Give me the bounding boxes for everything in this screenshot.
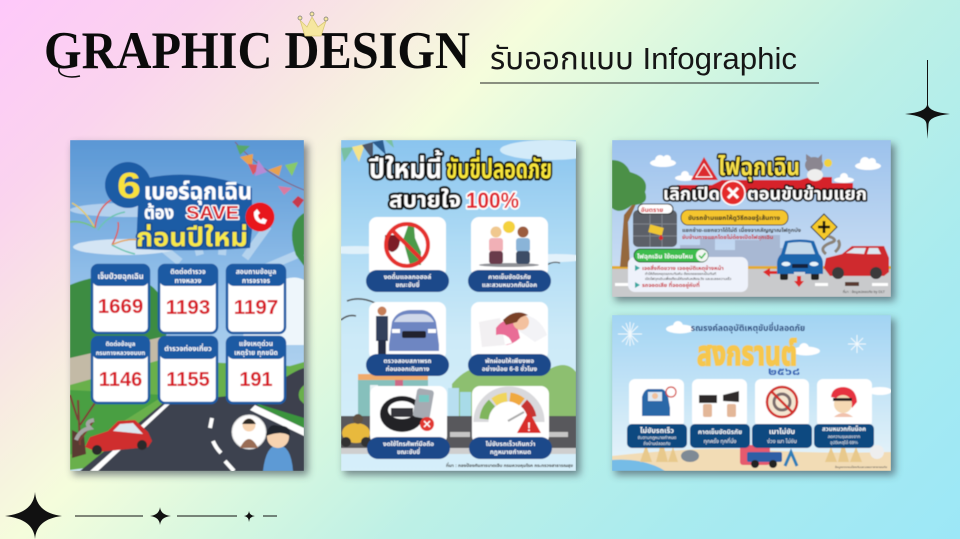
card: rest: อย่างน้อย 6-8 ชั่วโมง xyxy=(482,364,537,373)
poster title: เบอร์ฉุกเฉิน xyxy=(144,178,252,205)
card: seat belt: และสวมหมวกกันน็อค xyxy=(482,281,537,289)
crashed red car and tree xyxy=(70,395,152,458)
icon: scooter rider xyxy=(341,414,371,447)
card 1197: สอบถามข้อมูล xyxy=(236,268,276,276)
poster title: ไฟฉุกเฉิน xyxy=(718,154,800,182)
card: no phone: งดใช้โทรศัพท์มือถือ xyxy=(383,440,434,448)
white advice box: เปิดไฟฉุกเฉินเพื่อเตือนให้รถคันหลังระวัง และชะลอความเร็ว xyxy=(645,276,731,281)
icon: warning triangle xyxy=(691,157,718,180)
white advice box xyxy=(628,257,748,292)
road xyxy=(612,269,891,297)
intersection diagram: อันตราย xyxy=(641,206,663,214)
card 1193: 1193 xyxy=(166,296,210,319)
card: vehicle check: ก่อนออกเดินทาง xyxy=(386,365,430,373)
sky background xyxy=(612,140,891,267)
card: speed gauge xyxy=(469,386,552,459)
source note: ที่มา : ข้อมูลปลอดภัย by DLT xyxy=(843,289,886,294)
explanation text: แยกซ้าย-แยกขวาได้ไม่ดี เนื่องจากสัญญาณไฟถูกบัง xyxy=(682,226,801,234)
card: seat belt xyxy=(690,379,750,448)
poster title xyxy=(368,150,552,212)
poster title xyxy=(663,154,867,204)
smoke xyxy=(823,236,839,254)
red car xyxy=(824,246,889,279)
poster title xyxy=(105,162,252,252)
card 1155: 1155 xyxy=(166,369,210,391)
card: helmet xyxy=(814,379,874,448)
card 1146: 1146 xyxy=(99,369,142,391)
card: no drunk driving: ง่วง เมา ไม่ขับ xyxy=(767,438,797,445)
poster title: ขับขี่ปลอดภัย xyxy=(446,150,552,184)
card: no speeding: ถึงบ้านปลอดภัย xyxy=(643,440,671,446)
sky background xyxy=(70,140,304,471)
card: no drunk driving xyxy=(752,379,812,448)
card 191: 191 xyxy=(239,369,273,391)
card 1193: ติดต่อตำรวจ xyxy=(170,268,206,276)
icon: red X xyxy=(721,181,745,205)
card 1669: 1669 xyxy=(98,295,143,318)
title: Graphic Design: GRAPHIC DESIGN xyxy=(44,22,470,80)
poster title: SAVE xyxy=(186,203,239,223)
card 1193: ทางหลวง xyxy=(175,278,202,285)
card 1197 xyxy=(227,265,285,333)
panel: Songkran safety poster xyxy=(612,315,892,471)
road sign xyxy=(811,214,837,240)
panel: emergency numbers poster xyxy=(70,140,304,471)
green pill: ไฟฉุกเฉิน ใช้ตอนไหน xyxy=(637,252,693,262)
poster title: ต้อง xyxy=(144,202,174,224)
hills xyxy=(70,278,167,358)
card 1669 xyxy=(92,265,149,333)
panel: safe new year driving poster: 100% xyxy=(466,188,519,213)
poster title: เลิกเปิด xyxy=(663,184,720,204)
card: vehicle check: ตรวจสอบสภาพรถ xyxy=(384,358,432,365)
fireworks xyxy=(70,198,140,254)
card: speed gauge: ! xyxy=(527,420,531,434)
campaign heading: รณรงค์ลดอุบัติเหตุขับขี่ปลอดภัย xyxy=(691,322,805,333)
card 1669: เจ็บป่วยฉุกเฉิน xyxy=(97,272,144,282)
icon: crown xyxy=(298,12,328,36)
poster title: ปีใหม่นี้ xyxy=(368,150,443,184)
icon: sparkle top right xyxy=(905,60,950,139)
blue car xyxy=(777,240,823,280)
white advice box: ทำให้ต้องหยุดรถกะทันหัน ต้องถอยออกเป็นทันที xyxy=(645,271,716,276)
songkran lettering: สงกรานต์ xyxy=(697,335,797,373)
panel: safe new year driving poster xyxy=(341,140,576,471)
card: helmet: ลดความรุนแรงจาก xyxy=(828,434,861,440)
card: no alcohol xyxy=(366,217,449,292)
poster title: 6 xyxy=(117,165,141,206)
sky background xyxy=(341,140,576,471)
green pill xyxy=(634,249,708,262)
icon: red phone xyxy=(246,202,274,232)
sand and scenery xyxy=(612,440,891,471)
card: no speeding: ขับตามกฎหมายกำหนด xyxy=(638,434,677,440)
card: no alcohol: ขณะขับขี่ xyxy=(395,280,420,289)
card 1197: 1197 xyxy=(234,296,278,319)
tuk tuk scene xyxy=(740,445,797,468)
source note: ข้อมูลจากกรมป้องกันและบรรเทาสาธารณภัย xyxy=(835,465,887,469)
poster title: ก่อนปีใหม่ xyxy=(136,222,248,252)
bunting xyxy=(341,140,394,162)
card 191: เหตุร้าย ทุกชนิด xyxy=(234,349,278,358)
card 191: แจ้งเหตุด่วน xyxy=(239,340,273,349)
panel: Songkran safety poster: ๒๕๖๘ xyxy=(768,366,800,378)
icon: sparkles bottom left xyxy=(5,492,277,539)
sunbursts xyxy=(618,322,866,353)
card: vehicle check xyxy=(366,302,449,376)
card 1146: ติดต่อข้อมูล xyxy=(105,340,136,348)
card: seat belt: คาดเข็มขัดนิรภัย xyxy=(698,428,742,436)
city silhouette xyxy=(680,234,783,267)
subtitle: รับออกแบบ Infographic xyxy=(490,41,797,76)
card: seat belt: ทุกครั้ง ทุกที่นั่ง xyxy=(704,437,737,445)
road xyxy=(80,396,304,471)
explanation text: ขับข้ามทางแยกโดยไม่ต้องเปิดไฟฉุกเฉิน xyxy=(682,233,774,241)
white advice box: รถจอดเสีย ที่จอดอยู่กับที่ xyxy=(642,281,700,289)
card 1155 xyxy=(159,337,217,403)
card: no speeding: ไม่ขับรถเร็ว xyxy=(640,426,674,435)
panel: hazard lights poster xyxy=(612,140,891,297)
red roof shape xyxy=(677,177,853,193)
card: no alcohol: งดดื่มแอลกอฮอล์ xyxy=(384,272,431,281)
card: helmet: อุบัติเหตุได้ 69% xyxy=(830,439,858,446)
card: no drunk driving: เมาไม่ขับ xyxy=(769,427,796,436)
card: speed gauge: ไม่ขับรถเร็วเกินกว่า xyxy=(486,440,536,448)
poster title: สบายใจ xyxy=(389,187,461,212)
source note: ที่มา : กองป้องกันการบาดเจ็บ กรมควบคุมโรค กระทรวงสาธารณสุข xyxy=(446,462,573,469)
card: no phone xyxy=(367,386,450,459)
card: rest: พักผ่อนให้เพียงพอ xyxy=(485,357,534,365)
bunting xyxy=(235,142,304,208)
card 1155: ตำรวจท่องเที่ยว xyxy=(164,343,212,353)
card 1193 xyxy=(159,265,217,333)
road xyxy=(341,416,576,448)
intersection diagram xyxy=(633,204,677,247)
card: rest xyxy=(468,302,551,376)
card: seat belt xyxy=(468,217,551,292)
card: speed gauge: กฎหมายกำหนด xyxy=(490,448,531,456)
card: no speeding xyxy=(627,379,687,448)
phone call characters xyxy=(232,415,293,471)
red arrows xyxy=(763,268,804,287)
card: no phone: ขณะขับขี่ xyxy=(397,447,420,456)
card: seat belt: คาดเข็มขัดนิรภัย xyxy=(488,273,531,281)
sky background xyxy=(612,315,891,471)
card: helmet: สวมหมวกกันน็อค xyxy=(822,426,866,433)
card 1146 xyxy=(92,337,149,403)
white advice box: เจอสิ่งกีดขวาง เจออุบัติเหตุข้างหน้า xyxy=(642,264,724,272)
explanation text xyxy=(682,226,801,241)
card 1197: การจราจร xyxy=(242,278,271,285)
icon: cat with sign xyxy=(805,154,832,181)
poster title: ตอนขับข้ามแยก xyxy=(747,184,867,204)
card 191 xyxy=(227,337,285,403)
panel shadows xyxy=(73,144,895,475)
tree xyxy=(612,160,646,267)
yellow callout: ขับรถข้ามแยกให้ดูวิธีถอยรู้เส้นทาง xyxy=(688,214,780,222)
city and trees xyxy=(358,361,576,418)
yellow callout xyxy=(681,210,788,225)
card 1146: กรมทางหลวงชนบท xyxy=(96,351,145,357)
